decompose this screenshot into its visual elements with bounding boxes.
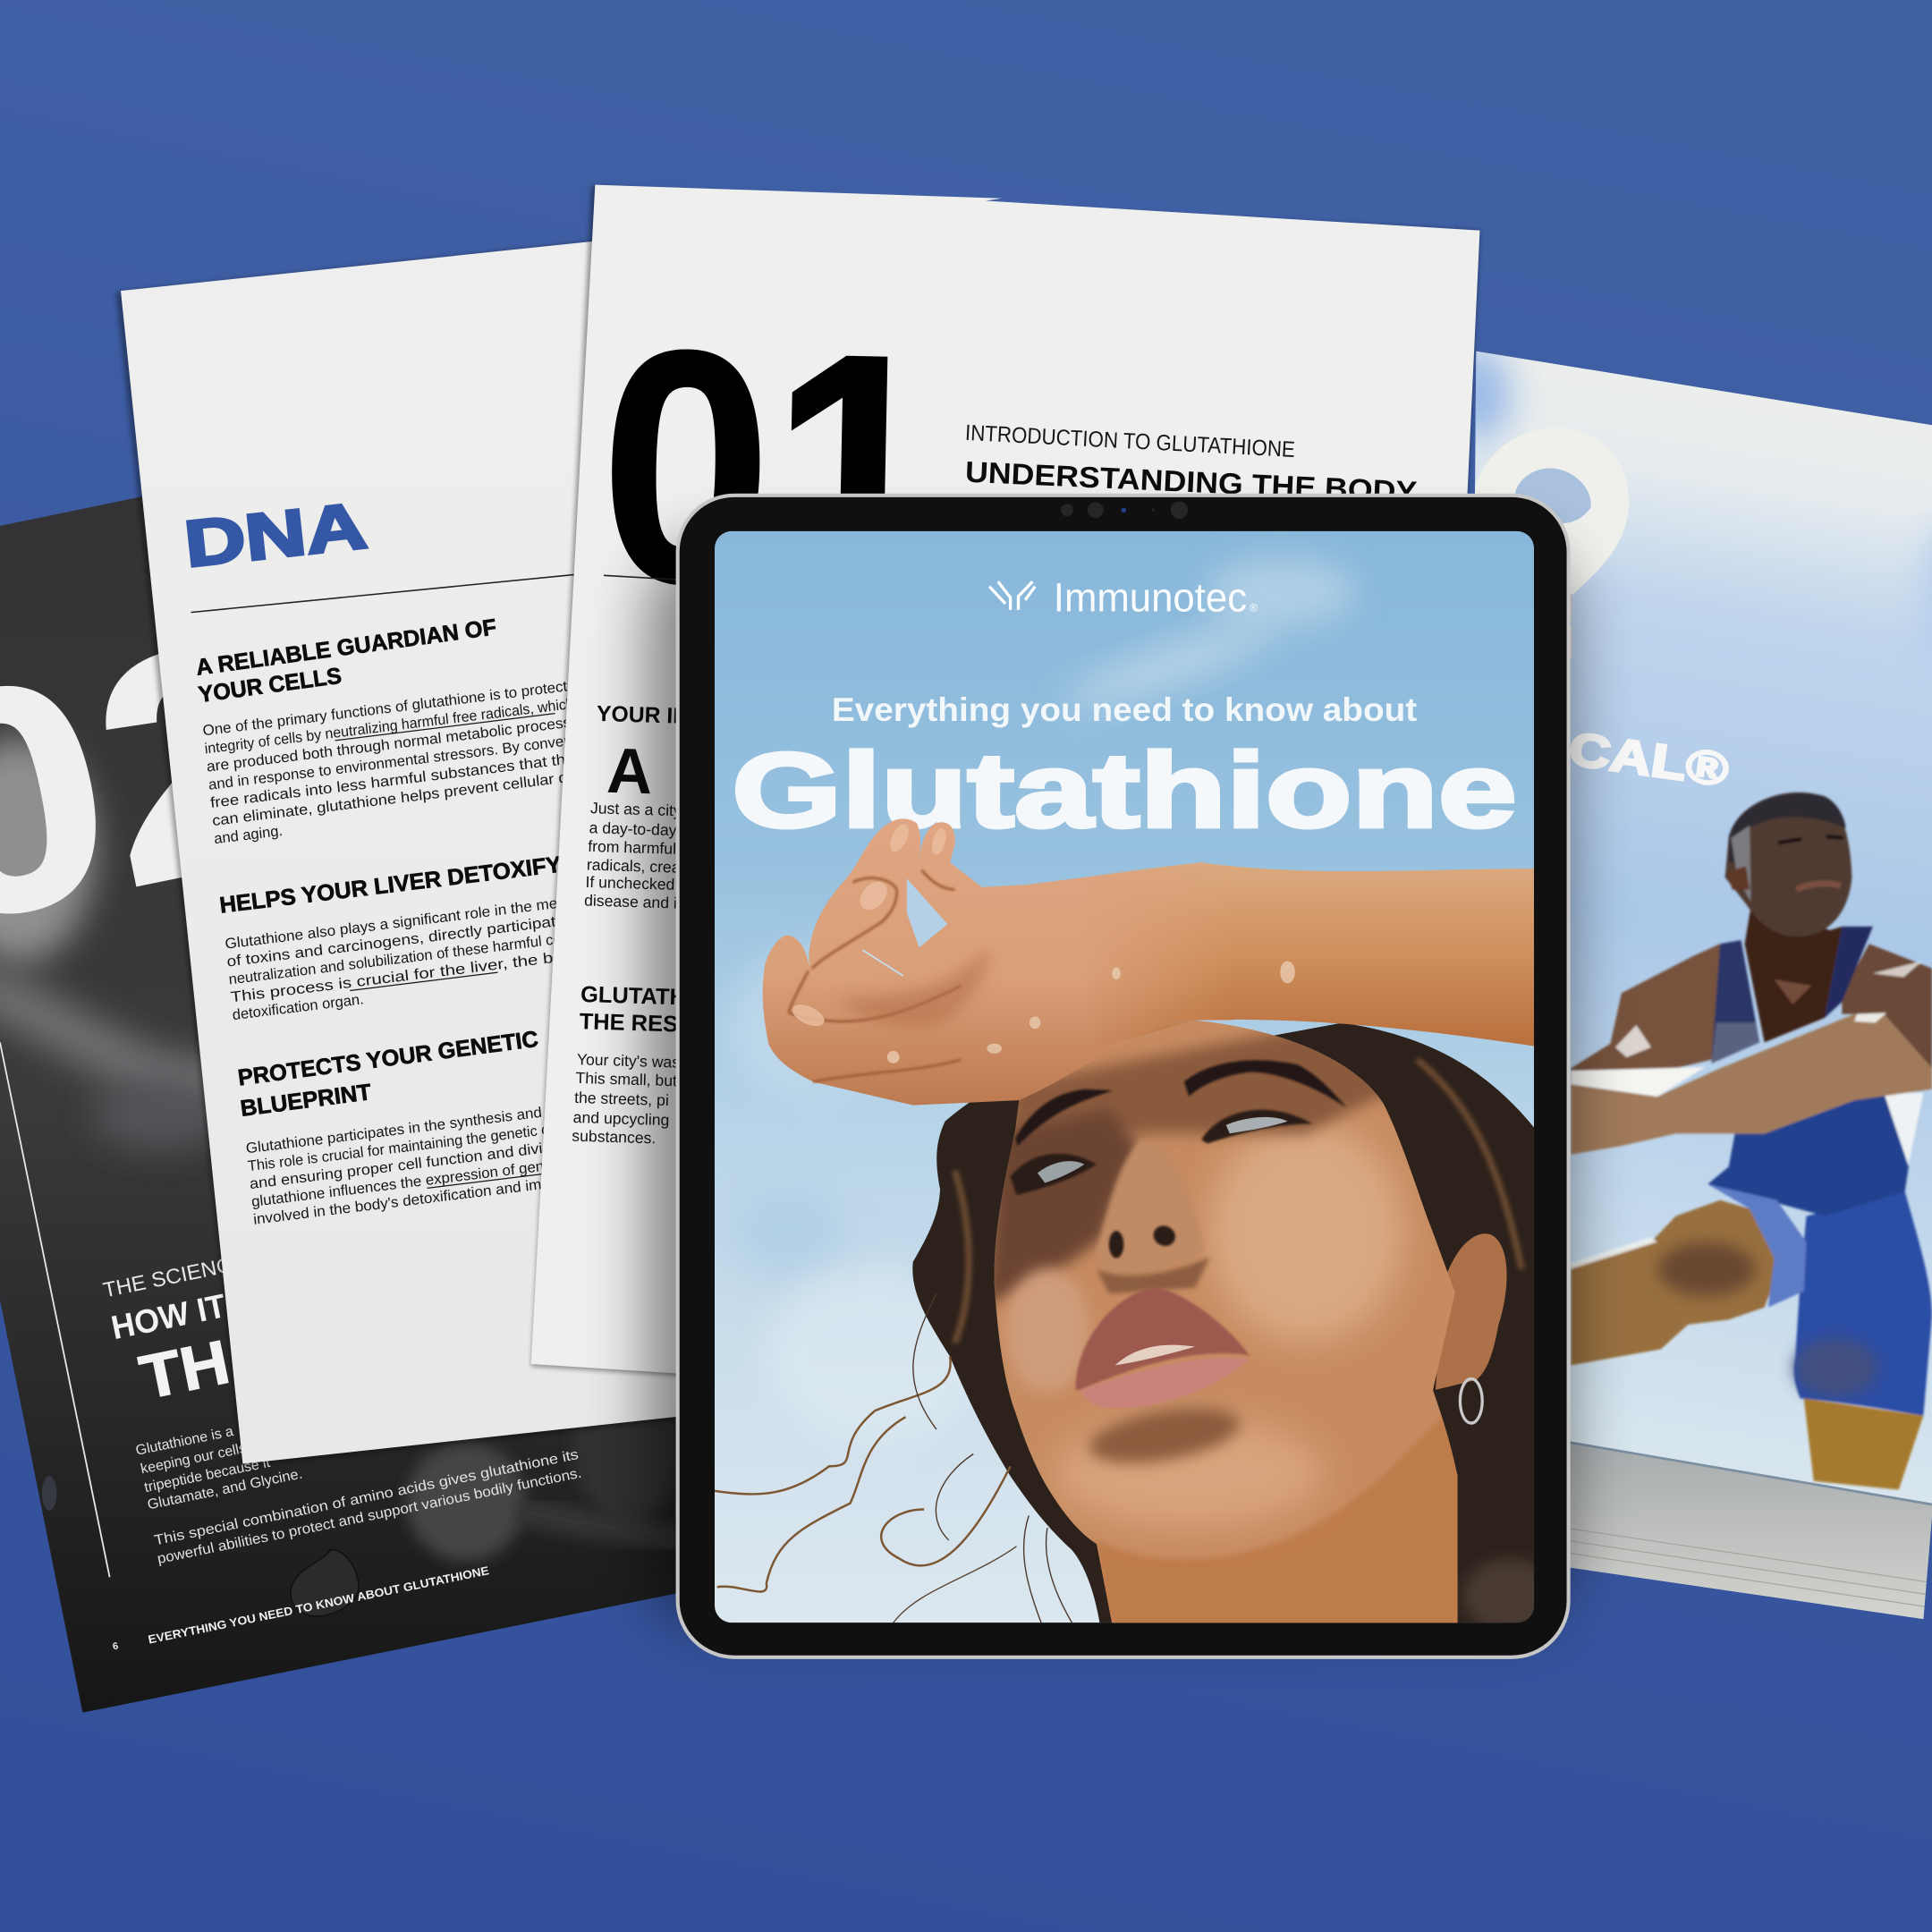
section: reliable guardian: and in response to environmental stressors. By convert [208, 732, 574, 793]
paragraph: city analogy: radicals, create [587, 856, 694, 877]
finger creases [789, 870, 961, 1081]
heading: glutathione: THE RESCUE [579, 1009, 726, 1038]
heading: HOW IT [108, 1286, 229, 1346]
section: reliable guardian: and aging. [213, 822, 284, 847]
water drop, page edge [42, 1476, 56, 1511]
paragraph: city analogy [584, 799, 694, 912]
paper stack edge [1564, 1442, 1932, 1619]
display heading: TH [134, 1327, 235, 1412]
photo: woman [715, 1011, 1556, 1639]
section: genetic blueprint [236, 1027, 555, 1228]
paragraph: waste: substances. [572, 1127, 657, 1147]
paragraph: waste: the streets, pi [574, 1089, 669, 1109]
panel: DNA page [115, 234, 789, 1466]
left eye [1011, 1154, 1097, 1195]
forearms [1571, 1014, 1932, 1155]
ear [1436, 1233, 1507, 1390]
wordmark: Immunotec [1054, 574, 1247, 620]
face [973, 1011, 1466, 1639]
shorts panel [1707, 1184, 1806, 1308]
section: genetic blueprint: This role is crucial for maintaining the genetic c [247, 1121, 549, 1174]
earring [1460, 1378, 1482, 1423]
palm shadow [838, 949, 988, 1027]
shorts [1793, 1191, 1932, 1416]
section: genetic blueprint: involved in the body's detoxification and imm [252, 1174, 555, 1228]
heading: your immune: YOUR IMMUNE [597, 702, 757, 731]
section: reliable guardian: YOUR CELLS [197, 664, 343, 708]
section: liver detox: detoxification organ. [232, 990, 364, 1023]
water droplets [887, 961, 1295, 1063]
intro text: powerful abilities to protect and support various bodily functions. [156, 1466, 583, 1567]
section: reliable guardian: One of the primary functions of glutathione is to protect [202, 677, 568, 739]
paragraph: city analogy: from harmful [588, 837, 676, 858]
tablet shadow [647, 542, 1571, 1626]
intro text: tripeptide because it [143, 1455, 272, 1496]
section: reliable guardian: integrity of cells by neutralizing harmful free radicals, which [204, 695, 575, 758]
logo icon [989, 581, 1035, 610]
head [1725, 792, 1852, 936]
upper arm [1571, 944, 1726, 1084]
section: reliable guardian: A RELIABLE GUARDIAN OF [194, 614, 498, 681]
section: reliable guardian: are produced both through normal metabolic process [206, 714, 572, 775]
section: genetic blueprint: and ensuring proper cell function and divis [249, 1139, 551, 1192]
section: genetic blueprint: Glutathione participates in the synthesis and [245, 1104, 543, 1157]
section: liver detox [218, 852, 566, 1023]
heading: glutathione: GLUTATHIONE [580, 982, 742, 1012]
section: liver detox: This process is crucial for the liver, the bo [230, 948, 564, 1005]
lit cheek [1208, 1122, 1404, 1343]
finger gap [907, 878, 947, 947]
intro text: Glutamate, and Glycine. [146, 1466, 304, 1513]
intro text: This special combination of amino acids gives glutathione its [153, 1447, 580, 1548]
section: reliable guardian: free radicals into less harmful substances that the [209, 750, 575, 811]
running footer: EVERYTHING YOU NEED TO KNOW ABOUT GLUTATHIONE [147, 1563, 490, 1647]
lip shadow [1085, 1398, 1244, 1473]
singlet [1707, 1093, 1909, 1216]
camera array [1061, 502, 1188, 519]
screen: ebook cover [715, 531, 1556, 1639]
intro text: keeping our cells [140, 1441, 248, 1477]
nostrils [1109, 1231, 1123, 1258]
intro text [134, 1424, 583, 1567]
section: genetic blueprint: BLUEPRINT [239, 1080, 373, 1122]
nose [1097, 1140, 1205, 1281]
section: reliable guardian [194, 614, 584, 847]
panel: section 02 dark page [0, 487, 813, 1719]
numeral fragment [1475, 429, 1630, 596]
section: genetic blueprint: PROTECTS YOUR GENETIC [236, 1027, 540, 1091]
kicker: INTRODUCTION TO GLUTATHIONE [964, 421, 1296, 462]
drop cap: A [606, 735, 654, 808]
cover title: Glutathione [732, 732, 1517, 850]
paragraph: waste [572, 1050, 693, 1147]
section: liver detox: of toxins and carcinogens, directly participati [226, 912, 560, 970]
paragraph: city analogy: a day-to-day [589, 818, 677, 839]
paragraph: city analogy: disease and i [584, 892, 677, 912]
panel: section 01 page [531, 185, 1479, 1419]
kicker: THE SCIENCE [101, 1250, 248, 1301]
lit jaw [1054, 1417, 1325, 1528]
section: liver detox: HELPS YOUR LIVER DETOXIFY [218, 852, 563, 919]
section: genetic blueprint: glutathione influences the expression of gene [250, 1157, 553, 1210]
hair [912, 1022, 1540, 1626]
logo [989, 574, 1258, 620]
section: reliable guardian: can eliminate, glutathione helps prevent cellular da [211, 767, 578, 829]
paragraph: city analogy: If unchecked [585, 873, 675, 894]
heading fragment: CAL® [1566, 724, 1732, 797]
folio: 6 [112, 1640, 119, 1652]
intro text: Glutathione is a [134, 1424, 235, 1459]
numeral 01: 01 [597, 282, 945, 657]
loose curls [715, 1293, 1072, 1623]
right eyebrow [1184, 1060, 1347, 1107]
heading DNA: DNA [181, 489, 370, 581]
logo: ® [1250, 601, 1258, 614]
shadowed forehead [1011, 1011, 1404, 1171]
straps [1711, 940, 1759, 1063]
tablet [678, 496, 1572, 1657]
neck [1097, 1393, 1466, 1626]
paragraph: waste: This small, but [575, 1069, 677, 1089]
photo: arm and hand [763, 818, 1534, 1106]
finger nails [855, 877, 893, 915]
left eye shadow [986, 1109, 1140, 1306]
photo: athlete [1571, 792, 1932, 1489]
section: liver detox: neutralization and solubilization of these harmful co [228, 930, 562, 987]
section: liver detox: Glutathione also plays a significant role in the me [225, 894, 558, 953]
title: UNDERSTANDING THE BODY [964, 456, 1418, 509]
paragraph: waste: Your city's waste [577, 1050, 693, 1072]
neck and chest [1745, 900, 1842, 1042]
heading: glutathione [579, 982, 742, 1038]
left eyebrow [1015, 1089, 1113, 1146]
thigh [1571, 1200, 1775, 1365]
right eye [1201, 1110, 1312, 1143]
paragraph: waste: and upcycling [572, 1108, 670, 1129]
vertical rule [0, 1042, 110, 1577]
paragraph: city analogy: Just as a city [590, 799, 682, 819]
panel: athlete page [1446, 333, 1932, 1639]
water drop [291, 1550, 359, 1616]
lips [1076, 1288, 1250, 1390]
subtitle: Everything you need to know about [832, 691, 1417, 728]
lower leg [1804, 1399, 1923, 1489]
